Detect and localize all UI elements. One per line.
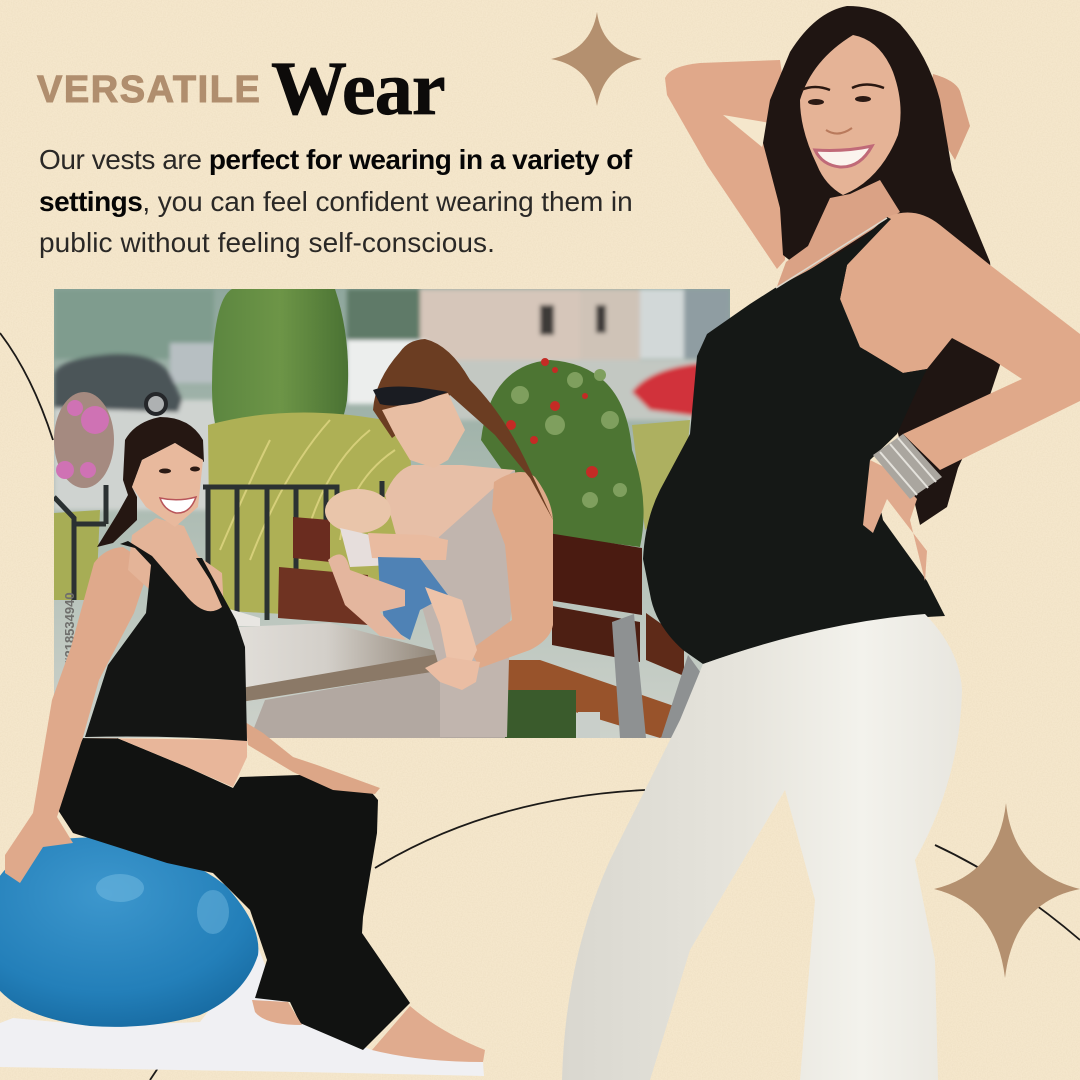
strap trim <box>776 218 887 288</box>
description text: Our vests are perfect for wearing in a variety of <box>39 144 632 175</box>
eyes <box>808 96 871 105</box>
hair <box>763 6 1000 525</box>
bracelets <box>873 434 942 499</box>
nose <box>826 128 852 134</box>
exercise ball <box>0 838 258 1027</box>
nursing mother <box>325 339 553 737</box>
table <box>226 608 444 702</box>
raised arm <box>665 60 790 269</box>
smile <box>815 146 872 167</box>
hair and ponytail <box>97 417 204 547</box>
armpit gap <box>723 115 770 147</box>
bench <box>278 517 706 738</box>
skirt <box>254 672 505 738</box>
description text: settings, you can feel confident wearing them in <box>39 186 633 216</box>
eyebrows <box>801 84 884 90</box>
figure: seated woman on exercise ball <box>0 417 485 1076</box>
face <box>132 443 203 527</box>
title <box>36 47 445 131</box>
black top <box>85 541 247 741</box>
belly <box>83 738 247 787</box>
left arm and hand <box>5 547 150 883</box>
black tank top <box>643 217 945 664</box>
title: VERSATILE <box>37 69 261 111</box>
fence <box>54 481 382 620</box>
stock watermark: | #218534940 <box>62 592 77 672</box>
chest and neck <box>128 518 224 618</box>
photo: mother nursing on park bench <box>54 289 730 738</box>
description text: public without feeling self-conscious. <box>39 227 495 258</box>
feet <box>252 1000 485 1062</box>
hand behind head <box>930 74 970 160</box>
neck and chest <box>775 180 900 292</box>
description text <box>39 144 633 258</box>
icon: sparkle bottom right <box>934 803 1080 978</box>
title: Wear <box>271 47 445 131</box>
face <box>800 35 901 195</box>
hand on hip <box>863 460 927 581</box>
white pants <box>562 614 962 1080</box>
figure: standing pregnant woman <box>562 6 1080 1080</box>
icon: sparkle top <box>551 12 642 106</box>
white floor <box>0 947 484 1076</box>
decorative curves <box>0 333 1080 1080</box>
pants <box>58 738 410 1050</box>
right arm and hand <box>245 722 380 794</box>
shoulder and right arm <box>840 212 1080 470</box>
